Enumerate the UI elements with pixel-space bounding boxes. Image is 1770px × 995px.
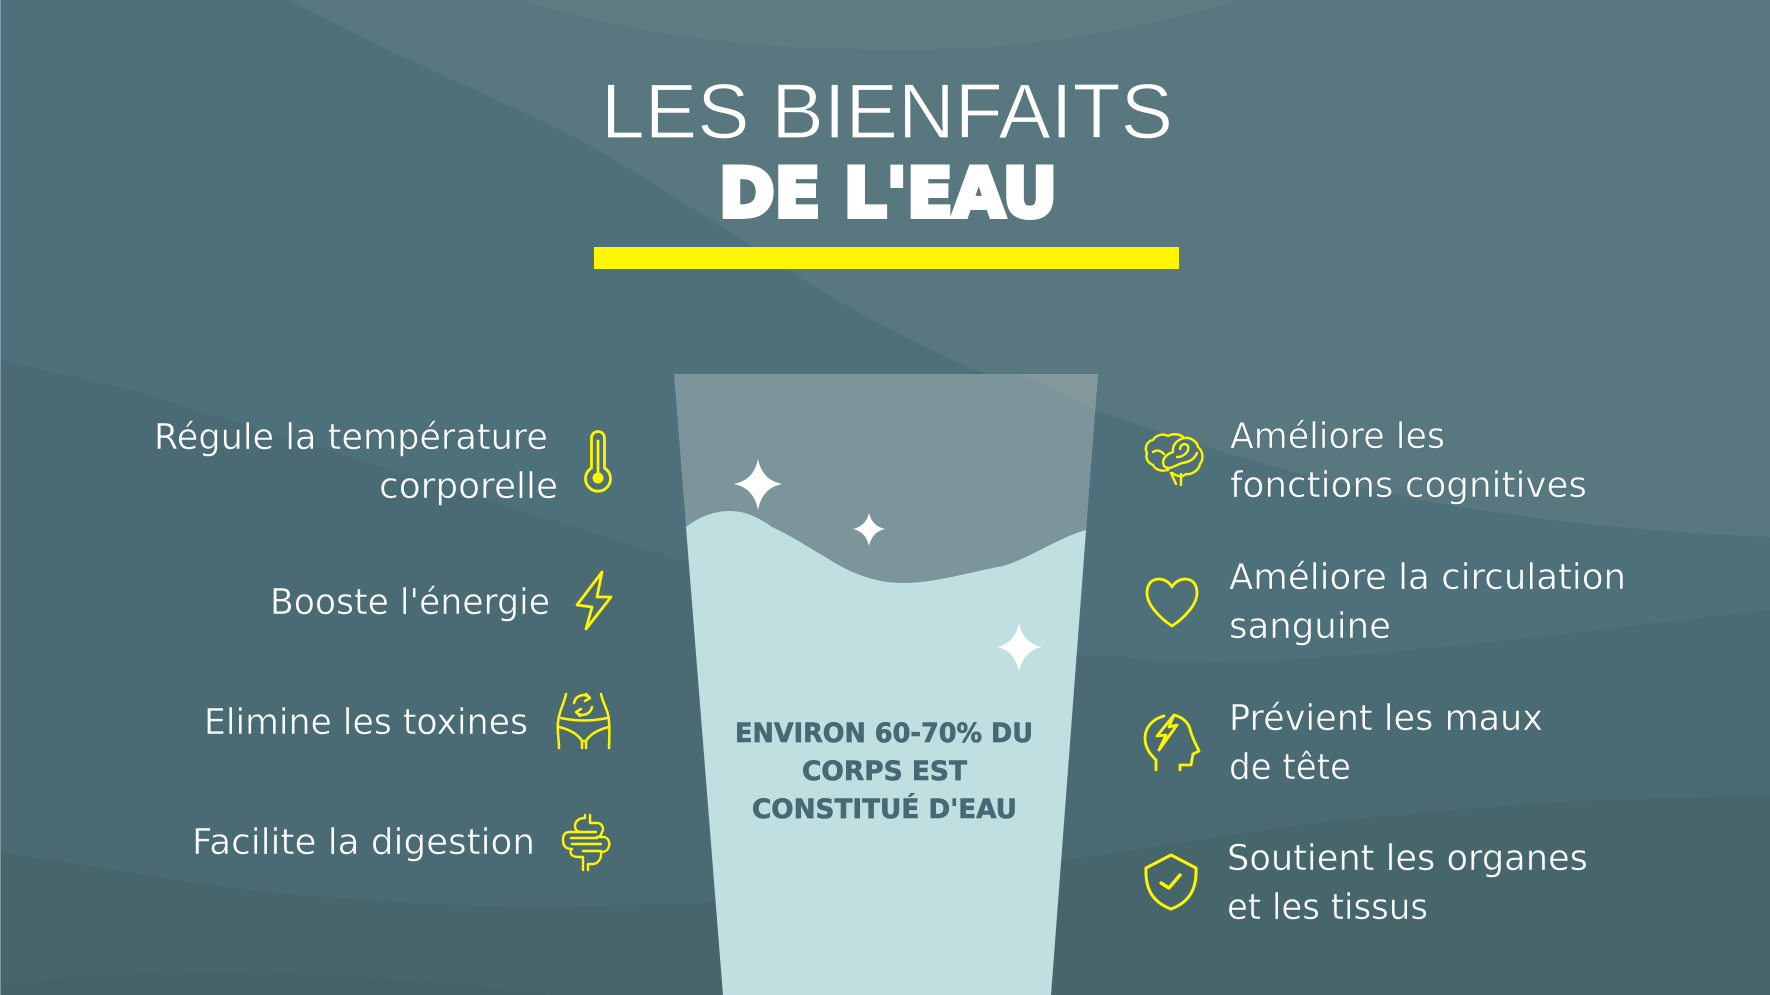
benefit: headaches: Prévient les maux bbox=[1229, 698, 1543, 739]
glass caption bbox=[735, 718, 1033, 825]
icon: waist with cycle arrows bbox=[558, 694, 609, 748]
icon: lightning bolt bbox=[577, 572, 611, 629]
sparkle 2 bbox=[853, 513, 885, 546]
benefit: circulation: sanguine bbox=[1229, 606, 1391, 647]
glass caption: CONSTITUÉ D'EAU bbox=[752, 793, 1017, 825]
benefit: headaches bbox=[1145, 698, 1543, 788]
glass caption: ENVIRON 60-70% DU bbox=[735, 718, 1033, 749]
benefit: digestion bbox=[192, 815, 609, 870]
icon: head with bolt bbox=[1145, 715, 1199, 770]
benefit: circulation: Améliore la circulation bbox=[1229, 557, 1626, 598]
title bbox=[601, 67, 1173, 234]
water bbox=[686, 511, 1086, 995]
icon: shield bbox=[1146, 855, 1196, 909]
benefit: cognitive functions: Améliore les bbox=[1230, 416, 1445, 457]
glass caption: CORPS EST bbox=[802, 756, 967, 787]
title line 1: LES BIENFAITS bbox=[601, 67, 1173, 155]
benefit: cognitive functions: fonctions cognitives bbox=[1230, 465, 1587, 506]
benefit: headaches: de tête bbox=[1229, 747, 1351, 788]
title line 2: DE L'EAU bbox=[719, 154, 1057, 234]
icon: brain bbox=[1146, 434, 1202, 485]
benefit: temperature: Régule la température bbox=[154, 417, 548, 458]
benefit: toxins: Elimine les toxines bbox=[204, 702, 528, 743]
benefit: organs: Soutient les organes bbox=[1227, 838, 1588, 879]
benefit: energy bbox=[270, 572, 611, 629]
benefit: temperature: corporelle bbox=[379, 466, 558, 507]
benefit: cognitive functions bbox=[1146, 416, 1587, 506]
icon: intestine bbox=[563, 815, 609, 870]
icon: thermometer bbox=[586, 432, 610, 491]
yellow title underline bbox=[594, 247, 1179, 269]
icon: heart bbox=[1147, 579, 1197, 626]
glass bbox=[674, 374, 1098, 995]
benefit: digestion: Facilite la digestion bbox=[192, 822, 535, 863]
benefit: organs bbox=[1146, 838, 1588, 928]
sparkle 1 bbox=[734, 459, 782, 510]
sparkle 3 bbox=[997, 623, 1042, 672]
benefit: circulation bbox=[1147, 557, 1626, 647]
benefit: organs: et les tissus bbox=[1227, 887, 1428, 928]
benefit: energy: Booste l'énergie bbox=[270, 582, 550, 623]
glass reflection corner bbox=[1020, 374, 1098, 410]
benefit: toxins bbox=[204, 694, 609, 748]
glass body bbox=[674, 374, 1098, 995]
benefit: temperature bbox=[154, 417, 610, 507]
